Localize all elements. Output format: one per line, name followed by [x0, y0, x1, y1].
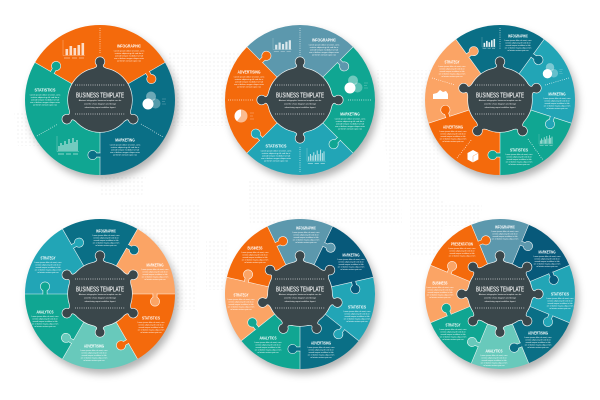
hub: used for chart, diagram and design: [484, 103, 517, 106]
text: analytics: ad minim veniam quis nos: [257, 352, 279, 354]
icon: thin bar chart: [539, 134, 553, 146]
text: analytics: [31, 309, 59, 328]
text: presentation: PRESENTATION: [451, 241, 473, 246]
text: advertising: [234, 69, 264, 88]
text: statistics: ad minim veniam quis nos: [508, 164, 530, 166]
hub: BUSINESS TEMPLATE: [76, 90, 124, 99]
text: infographic: ectetur adipiscing elit sed do ei: [293, 234, 319, 237]
text: advertising: usmod tempor incididunt ut lab: [525, 341, 551, 344]
text: infographic: Lorem ipsum dolor sit amet, cons: [491, 230, 519, 233]
shadow: [428, 30, 578, 180]
text: analytics: Lorem ipsum dolor sit amet, cons: [254, 341, 282, 344]
text: marketing: ore et dolore magna aliqua enim: [335, 125, 365, 128]
text: infographic: ore et dolore magna aliqua enim: [114, 57, 144, 60]
text: advertising: usmod tempor incididunt ut lab: [235, 80, 264, 84]
text: advertising: ADVERTISING: [311, 340, 331, 345]
text: statistics: ore et dolore magna aliqua enim: [261, 157, 291, 160]
hub: [257, 57, 343, 143]
text: strategy: usmod tempor incididunt ut lab: [439, 70, 465, 73]
icon: area chart: [433, 90, 448, 99]
text: marketing: [335, 111, 365, 130]
text: advertising: ore et dolore magna aliqua enim: [308, 353, 335, 356]
text: strategy: ectetur adipiscing elit sed do ei: [35, 264, 61, 267]
text: infographic: ore et dolore magna aliqua enim: [505, 46, 532, 49]
hub: advertising report workflow layout: [485, 300, 516, 303]
text: analytics: ore et dolore magna aliqua enim: [481, 361, 508, 364]
text: advertising: ad minim veniam quis nos: [237, 86, 261, 88]
text: marketing: [543, 91, 571, 110]
text: statistics: ore et dolore magna aliqua enim: [506, 160, 533, 163]
text: statistics: [30, 87, 60, 106]
text: advertising: ore et dolore magna aliqua enim: [440, 137, 467, 140]
text: advertising: Lorem ipsum dolor sit amet, cons: [524, 336, 552, 339]
dotted dividers: [432, 28, 569, 160]
text: marketing: [337, 252, 365, 271]
text: analytics: ectetur adipiscing elit sed do ei: [255, 344, 281, 347]
text: business: ore et dolore magna aliqua enim: [427, 293, 454, 296]
text: advertising: Lorem ipsum dolor sit amet, cons: [80, 349, 108, 352]
text: analytics: Lorem ipsum dolor sit amet, cons: [480, 354, 508, 357]
icon: pie: [234, 110, 254, 122]
text: marketing: ectetur adipiscing elit sed do ei: [338, 261, 364, 264]
hub: used for chart, diagram and design: [284, 297, 317, 300]
text: presentation: ore et dolore magna aliqua enim: [449, 254, 476, 257]
shadow: [228, 30, 378, 180]
text: infographic: ad minim veniam quis nos: [117, 60, 141, 62]
chart: three piece puzzle circle: [25, 0, 202, 184]
text: infographic: Lorem ipsum dolor sit amet, cons: [292, 231, 320, 234]
hub: Abstract infographic business template can be: [79, 293, 122, 296]
text: advertising: ADVERTISING: [238, 69, 260, 74]
text: strategy: [34, 255, 62, 274]
text: advertising: ectetur adipiscing elit sed do ei: [525, 339, 551, 342]
text: statistics: [546, 291, 574, 310]
text: infographic: [92, 228, 120, 247]
text: advertising: ectetur adipiscing elit sed do ei: [81, 352, 107, 355]
puzzle joints: [35, 52, 171, 175]
text: advertising: [439, 124, 467, 143]
text: marketing: usmod tempor incididunt ut lab: [338, 263, 364, 266]
text: business: ore et dolore magna aliqua enim: [242, 258, 269, 261]
text: marketing: ectetur adipiscing elit sed do ei: [142, 271, 168, 274]
text: statistics: usmod tempor incididunt ut lab: [506, 158, 532, 161]
hub: used for chart, diagram and design: [284, 103, 317, 106]
hub: [457, 57, 543, 139]
icon: thin bar chart: [57, 136, 79, 154]
text: statistics: ore et dolore magna aliqua enim: [344, 317, 371, 320]
icon: bar chart: [273, 38, 292, 52]
text: advertising: ad minim veniam quis nos: [310, 357, 332, 359]
text: business: BUSINESS: [432, 280, 448, 285]
text: analytics: usmod tempor incididunt ut lab: [255, 346, 281, 349]
text: infographic: [491, 224, 519, 240]
text: marketing: ore et dolore magna aliqua enim: [110, 151, 140, 154]
text: strategy: usmod tempor incididunt ut lab: [228, 303, 254, 306]
shadow: [428, 224, 578, 374]
text: statistics: ad minim veniam quis nos: [346, 321, 368, 323]
text: marketing: ad minim veniam quis nos: [113, 154, 137, 156]
text: infographic: usmod tempor incididunt ut lab: [293, 236, 319, 239]
text: statistics: ectetur adipiscing elit sed do ei: [31, 96, 60, 99]
text: marketing: [533, 249, 561, 268]
hub: advertising report workflow layout: [85, 106, 116, 109]
text: statistics: ectetur adipiscing elit sed do ei: [262, 152, 291, 155]
text: statistics: Lorem ipsum dolor sit amet, cons: [30, 94, 60, 96]
text: infographic: INFOGRAPHIC: [312, 37, 336, 42]
text: analytics: ANALYTICS: [36, 309, 54, 314]
text: marketing: Lorem ipsum dolor sit amet, cons: [337, 258, 365, 261]
text: advertising: ADVERTISING: [443, 124, 463, 129]
text: statistics: ad minim veniam quis nos: [549, 308, 571, 310]
text: infographic: ore et dolore magna aliqua enim: [93, 241, 120, 244]
text: analytics: ectetur adipiscing elit sed do ei: [32, 318, 58, 321]
text: advertising: Lorem ipsum dolor sit amet, cons: [307, 346, 335, 349]
text: statistics: ad minim veniam quis nos: [33, 104, 57, 106]
text: strategy: Lorem ipsum dolor sit amet, cons: [227, 298, 255, 301]
text: strategy: ore et dolore magna aliqua enim: [439, 72, 466, 75]
text: marketing: ad minim veniam quis nos: [338, 128, 362, 130]
hub: BUSINESS TEMPLATE: [76, 284, 124, 293]
text: strategy: Lorem ipsum dolor sit amet, cons: [438, 65, 466, 68]
text: analytics: Lorem ipsum dolor sit amet, cons: [31, 315, 59, 318]
text: advertising: [80, 343, 108, 362]
text: analytics: ANALYTICS: [486, 348, 503, 353]
text: advertising: ad minim veniam quis nos: [83, 360, 105, 362]
text: advertising: [524, 330, 552, 349]
text: marketing: usmod tempor incididunt ut lab: [336, 122, 365, 126]
hub: [59, 57, 141, 132]
text: analytics: ectetur adipiscing elit sed do ei: [481, 357, 507, 360]
text: strategy: STRATEGY: [40, 255, 56, 260]
text: strategy: usmod tempor incididunt ut lab: [35, 266, 61, 269]
segments: [407, 0, 600, 191]
hub: advertising report workflow layout: [485, 106, 516, 109]
text: strategy: ectetur adipiscing elit sed do ei: [440, 331, 466, 334]
text: infographic: [309, 37, 339, 56]
text: marketing: Lorem ipsum dolor sit amet, cons: [543, 97, 571, 100]
text: marketing: ore et dolore magna aliqua enim: [142, 275, 169, 278]
chart: four piece puzzle circle: [194, 0, 406, 206]
text: strategy: usmod tempor incididunt ut lab: [440, 333, 466, 336]
text: business: Lorem ipsum dolor sit amet, cons: [426, 286, 454, 289]
text: statistics: ore et dolore magna aliqua enim: [30, 101, 60, 104]
text: advertising: usmod tempor incididunt ut lab: [308, 351, 334, 354]
text: strategy: ad minim veniam quis nos: [441, 76, 463, 78]
text: statistics: ectetur adipiscing elit sed do ei: [547, 300, 573, 303]
text: analytics: ore et dolore magna aliqua enim: [32, 322, 59, 325]
text: statistics: ad minim veniam quis nos: [264, 160, 288, 162]
text: business: ectetur adipiscing elit sed do ei: [427, 289, 453, 292]
hub: advertising report workflow layout: [285, 106, 316, 109]
puzzle joints: [25, 223, 175, 365]
text: advertising: ore et dolore magna aliqua enim: [234, 83, 264, 86]
text: statistics: STATISTICS: [551, 291, 569, 296]
text: marketing: [110, 137, 140, 156]
chart: six piece puzzle circle: [6, 197, 194, 391]
text: infographic: usmod tempor incididunt ut lab: [93, 239, 119, 242]
shadow: [228, 224, 378, 374]
text: infographic: ad minim veniam quis nos: [295, 242, 317, 244]
icon: cube: [468, 150, 478, 162]
text: infographic: Lorem ipsum dolor sit amet, cons: [92, 234, 120, 237]
text: infographic: [504, 33, 532, 52]
text: marketing: MARKETING: [115, 137, 135, 142]
text: infographic: INFOGRAPHIC: [96, 228, 116, 233]
segments: [6, 197, 194, 391]
text: marketing: ad minim veniam quis nos: [536, 266, 558, 268]
text: advertising: ectetur adipiscing elit sed do ei: [308, 349, 334, 352]
text: statistics: ad minim veniam quis nos: [140, 332, 162, 334]
hub: [457, 251, 543, 337]
text: strategy: [227, 292, 255, 311]
text: marketing: usmod tempor incididunt ut lab: [544, 102, 570, 105]
text: business: [426, 280, 454, 299]
text: business: Lorem ipsum dolor sit amet, cons: [241, 251, 269, 254]
text: statistics: [343, 304, 371, 323]
hub: advertising report workflow layout: [85, 300, 116, 303]
text: statistics: STATISTICS: [510, 147, 528, 152]
text: advertising: [307, 340, 335, 359]
text: infographic: ectetur adipiscing elit sed do ei: [115, 52, 144, 55]
text: infographic: INFOGRAPHIC: [495, 224, 515, 229]
hub: BUSINESS TEMPLATE: [276, 284, 324, 293]
hub: used for chart, diagram and design: [84, 297, 117, 300]
text: statistics: ore et dolore magna aliqua enim: [138, 328, 165, 331]
text: marketing: ore et dolore magna aliqua enim: [534, 262, 561, 265]
text: statistics: Lorem ipsum dolor sit amet, cons: [261, 150, 291, 152]
segments: [205, 201, 386, 387]
hub: Abstract infographic business template can be: [479, 293, 522, 296]
chart: eight piece puzzle circle: [410, 204, 590, 384]
text: statistics: STATISTICS: [142, 315, 160, 320]
text: infographic: Lorem ipsum dolor sit amet, cons: [504, 39, 532, 42]
text: statistics: Lorem ipsum dolor sit amet, cons: [343, 310, 371, 313]
text: statistics: [261, 143, 291, 162]
text: marketing: MARKETING: [340, 111, 360, 116]
hub: Abstract infographic business template can be: [79, 99, 122, 102]
text: marketing: ectetur adipiscing elit sed do ei: [111, 146, 140, 149]
text: marketing: ad minim veniam quis nos: [546, 108, 568, 110]
text: statistics: usmod tempor incididunt ut lab: [344, 315, 370, 318]
text: advertising: usmod tempor incididunt ut lab: [81, 354, 107, 357]
text: advertising: ADVERTISING: [528, 330, 548, 335]
text: marketing: ore et dolore magna aliqua enim: [544, 104, 571, 107]
text: business: ectetur adipiscing elit sed do ei: [242, 254, 268, 257]
text: infographic: Lorem ipsum dolor sit amet, cons: [309, 44, 339, 46]
text: strategy: ore et dolore magna aliqua enim: [440, 335, 467, 338]
text: statistics: usmod tempor incididunt ut lab: [31, 98, 60, 102]
text: strategy: [439, 322, 467, 341]
text: statistics: usmod tempor incididunt ut lab: [138, 326, 164, 329]
text: marketing: usmod tempor incididunt ut lab: [142, 273, 168, 276]
text: analytics: ad minim veniam quis nos: [483, 365, 505, 367]
segments: [410, 204, 590, 384]
segments: [194, 0, 406, 206]
text: presentation: Lorem ipsum dolor sit amet, cons: [448, 247, 476, 250]
hub: [257, 251, 343, 336]
chart: seven piece puzzle circle: [205, 201, 386, 387]
text: marketing: ectetur adipiscing elit sed do ei: [544, 100, 570, 103]
text: statistics: ectetur adipiscing elit sed do ei: [138, 324, 164, 327]
text: strategy: Lorem ipsum dolor sit amet, cons: [439, 328, 467, 331]
text: marketing: MARKETING: [538, 249, 556, 254]
text: analytics: [480, 348, 508, 367]
puzzle joints: [227, 221, 376, 369]
text: infographic: ad minim veniam quis nos: [312, 54, 336, 56]
text: infographic: usmod tempor incididunt ut lab: [310, 48, 339, 52]
text: marketing: usmod tempor incididunt ut lab: [534, 260, 560, 263]
text: business: ad minim veniam quis nos: [244, 262, 266, 264]
icon: thin bar chart: [307, 148, 326, 163]
text: marketing: ore et dolore magna aliqua enim: [338, 265, 365, 268]
hub: BUSINESS TEMPLATE: [276, 90, 324, 99]
text: infographic: Lorem ipsum dolor sit amet, cons: [114, 50, 144, 52]
text: infographic: usmod tempor incididunt ut lab: [492, 235, 518, 238]
shadow: [28, 224, 178, 374]
text: strategy: [438, 59, 466, 78]
shadow: [28, 30, 178, 180]
text: infographic: [114, 43, 144, 62]
icon: bar chart: [482, 37, 496, 49]
chart: five piece puzzle circle: [407, 0, 600, 191]
text: infographic: ectetur adipiscing elit sed do ei: [505, 42, 531, 45]
hub: used for chart, diagram and design: [84, 103, 117, 106]
text: infographic: INFOGRAPHIC: [117, 43, 141, 48]
text: statistics: Lorem ipsum dolor sit amet, cons: [137, 321, 165, 324]
text: presentation: usmod tempor incididunt ut lab: [449, 252, 475, 255]
text: advertising: ADVERTISING: [84, 343, 104, 348]
text: statistics: STATISTICS: [266, 143, 287, 148]
text: strategy: ad minim veniam quis nos: [442, 339, 464, 341]
hub: used for chart, diagram and design: [484, 297, 517, 300]
text: infographic: INFOGRAPHIC: [296, 225, 316, 230]
text: advertising: ad minim veniam quis nos: [527, 347, 549, 349]
text: infographic: INFOGRAPHIC: [508, 33, 528, 38]
text: analytics: [254, 335, 282, 354]
text: business: ad minim veniam quis nos: [429, 297, 451, 299]
text: marketing: [141, 262, 169, 281]
dotted dividers: [37, 28, 163, 137]
text: marketing: Lorem ipsum dolor sit amet, cons: [533, 255, 561, 258]
text: business: [241, 245, 269, 264]
text: advertising: ectetur adipiscing elit sed do ei: [235, 78, 264, 81]
text: analytics: usmod tempor incididunt ut lab: [32, 320, 58, 323]
text: advertising: Lorem ipsum dolor sit amet, cons: [439, 130, 467, 133]
text: strategy: ectetur adipiscing elit sed do ei: [439, 68, 465, 71]
text: advertising: ad minim veniam quis nos: [442, 141, 464, 143]
hub: BUSINESS TEMPLATE: [476, 284, 524, 293]
text: infographic: ore et dolore magna aliqua enim: [309, 51, 339, 54]
hub: BUSINESS TEMPLATE: [476, 90, 524, 99]
text: business: usmod tempor incididunt ut lab: [242, 256, 268, 259]
text: marketing: MARKETING: [342, 252, 360, 257]
text: marketing: Lorem ipsum dolor sit amet, cons: [335, 118, 365, 120]
text: infographic: [292, 225, 320, 244]
text: business: BUSINESS: [248, 245, 263, 250]
text: advertising: Lorem ipsum dolor sit amet, cons: [234, 76, 264, 78]
text: statistics: STATISTICS: [348, 304, 366, 309]
text: advertising: ectetur adipiscing elit sed do ei: [440, 133, 466, 136]
text: statistics: ore et dolore magna aliqua enim: [547, 304, 574, 307]
background: dotted world map: [14, 52, 482, 310]
text: strategy: STRATEGY: [444, 59, 460, 64]
text: infographic: ore et dolore magna aliqua enim: [492, 237, 519, 240]
text: marketing: usmod tempor incididunt ut lab: [111, 148, 140, 152]
text: statistics: Lorem ipsum dolor sit amet, cons: [546, 297, 574, 300]
text: strategy: STRATEGY: [446, 322, 461, 327]
text: presentation: ectetur adipiscing elit sed do ei: [449, 250, 475, 253]
text: infographic: usmod tempor incididunt ut lab: [505, 44, 531, 47]
text: statistics: usmod tempor incididunt ut lab: [547, 302, 573, 305]
text: statistics: [137, 315, 165, 334]
dotted dividers: [228, 28, 372, 173]
text: analytics: usmod tempor incididunt ut lab: [481, 359, 507, 362]
text: advertising: usmod tempor incididunt ut lab: [440, 135, 466, 138]
hub: [59, 251, 141, 337]
text: marketing: ad minim veniam quis nos: [340, 269, 362, 271]
puzzle joints: [426, 220, 574, 368]
text: marketing: Lorem ipsum dolor sit amet, cons: [110, 144, 140, 146]
text: infographic: usmod tempor incididunt ut lab: [115, 54, 144, 58]
text: marketing: MARKETING: [146, 262, 164, 267]
text: advertising: ore et dolore magna aliqua enim: [81, 356, 108, 359]
text: advertising: ore et dolore magna aliqua enim: [525, 343, 552, 346]
text: statistics: Lorem ipsum dolor sit amet, cons: [505, 153, 533, 156]
text: infographic: ore et dolore magna aliqua enim: [293, 238, 320, 241]
hub: Abstract infographic business template can be: [279, 99, 322, 102]
text: business: usmod tempor incididunt ut lab: [427, 291, 453, 294]
text: marketing: ad minim veniam quis nos: [144, 279, 166, 281]
hub: Abstract infographic business template can be: [279, 293, 322, 296]
text: marketing: MARKETING: [548, 91, 566, 96]
text: marketing: ectetur adipiscing elit sed do ei: [336, 120, 365, 123]
hub: Abstract infographic business template can be: [479, 99, 522, 102]
text: infographic: ectetur adipiscing elit sed do ei: [310, 46, 339, 49]
icon: venn circles: [142, 92, 166, 110]
icon: venn circles: [344, 76, 368, 94]
text: infographic: ad minim veniam quis nos: [507, 50, 529, 52]
text: statistics: [505, 147, 533, 166]
text: strategy: Lorem ipsum dolor sit amet, cons: [34, 261, 62, 264]
text: statistics: STATISTICS: [34, 87, 56, 92]
text: strategy: ad minim veniam quis nos: [37, 272, 59, 274]
text: strategy: ectetur adipiscing elit sed do ei: [228, 301, 254, 304]
text: marketing: ectetur adipiscing elit sed do ei: [534, 258, 560, 261]
text: analytics: ad minim veniam quis nos: [34, 326, 56, 328]
text: infographic: ad minim veniam quis nos: [95, 245, 117, 247]
text: strategy: ad minim veniam quis nos: [230, 309, 252, 311]
hub: advertising report workflow layout: [285, 300, 316, 303]
text: analytics: ore et dolore magna aliqua enim: [255, 348, 282, 351]
text: strategy: ore et dolore magna aliqua enim: [35, 268, 62, 271]
text: statistics: usmod tempor incididunt ut lab: [262, 154, 291, 158]
text: statistics: ectetur adipiscing elit sed do ei: [506, 156, 532, 159]
icon: venn circles: [543, 63, 563, 78]
text: strategy: ore et dolore magna aliqua enim: [228, 305, 255, 308]
icon: bar chart: [63, 40, 85, 58]
text: presentation: [448, 241, 476, 257]
segments: [25, 0, 202, 184]
text: strategy: STRATEGY: [234, 292, 249, 297]
text: infographic: ectetur adipiscing elit sed do ei: [93, 237, 119, 240]
text: infographic: ectetur adipiscing elit sed do ei: [492, 233, 518, 236]
text: marketing: Lorem ipsum dolor sit amet, cons: [141, 268, 169, 271]
puzzle joints: [425, 32, 571, 175]
text: analytics: ANALYTICS: [260, 335, 277, 340]
puzzle joints: [238, 38, 362, 162]
text: statistics: ectetur adipiscing elit sed do ei: [344, 313, 370, 316]
